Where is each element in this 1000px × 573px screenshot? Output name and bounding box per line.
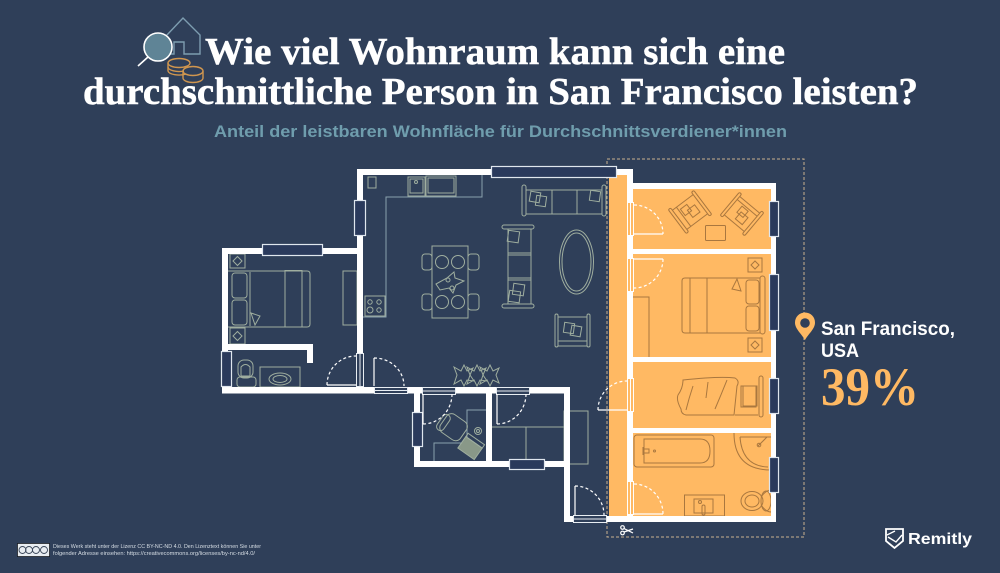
doors	[327, 202, 663, 522]
title: durchschnittliche Person in San Francisco leisten?	[83, 71, 918, 113]
furniture: hallway storage	[492, 411, 588, 464]
furniture: kitchen	[363, 175, 482, 317]
callout: San Francisco 39%	[795, 312, 955, 417]
furniture: affordable lounge	[668, 190, 764, 240]
license badge	[18, 544, 50, 556]
furniture: affordable bedroom	[633, 258, 765, 357]
Remitly logo	[886, 529, 972, 548]
icon: scissors on cut line	[621, 526, 633, 535]
subtitle: Anteil der leistbaren Wohnfläche für Durchschnittsverdiener*innen	[214, 122, 787, 141]
furniture: office with desk, chair and laptop	[434, 410, 486, 461]
license text: folgender Adresse einsehen: https://creativecommons.org/licenses/by-nc-nd/4.0/	[53, 551, 256, 557]
Remitly logo: Remitly	[908, 531, 972, 548]
title: Wie viel Wohnraum kann sich eine	[205, 31, 785, 73]
windows	[222, 166, 778, 492]
location label: USA	[821, 341, 859, 362]
license text: Dieses Werk steht unter der Lizenz CC BY-NC-ND 4.0. Den Lizenztext können Sie unter	[53, 544, 261, 550]
title	[83, 31, 918, 113]
license text	[53, 544, 261, 557]
icon: location pin	[795, 312, 815, 340]
furniture: affordable bathroom	[634, 433, 771, 516]
furniture: left bedroom and bath	[228, 254, 357, 387]
floor plan walls	[222, 169, 776, 522]
affordable area highlight	[609, 174, 772, 519]
furniture: sofas, rug and armchair	[502, 185, 606, 347]
furniture: dining table with plant	[422, 246, 479, 318]
location label: San Francisco,	[821, 319, 955, 340]
icon: plants on the ledge	[454, 365, 499, 386]
furniture: affordable room with messy bed	[677, 376, 763, 417]
percentage value: 39%	[821, 357, 919, 417]
icon: magnifier, house and coins	[138, 18, 203, 82]
dashed cut line around affordable area	[607, 159, 804, 537]
